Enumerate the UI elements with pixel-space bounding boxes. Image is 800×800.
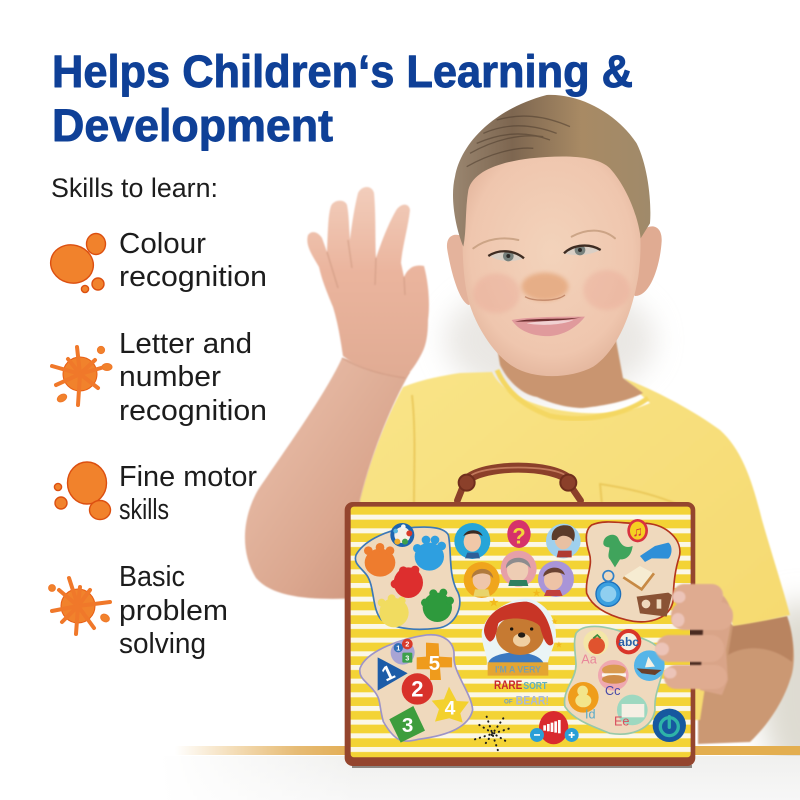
slogan: I'm a very rare sort of bear — [488, 662, 549, 708]
paw green — [421, 589, 454, 622]
panel: everyday objects — [586, 519, 680, 622]
text: colour recognition — [119, 228, 267, 293]
hair strands — [467, 116, 570, 167]
plus shape 5: 5 — [429, 652, 440, 675]
fingernails — [655, 591, 686, 678]
button 123: 3 — [405, 653, 409, 662]
radio — [637, 593, 672, 617]
clock — [596, 571, 621, 606]
letters Dd: Id — [585, 707, 596, 721]
dinosaur — [603, 535, 633, 567]
ship — [634, 650, 665, 681]
neck — [495, 335, 643, 408]
nose — [522, 273, 568, 301]
triangle 1: 1 — [378, 661, 398, 686]
slogan: I'm a very rare sort of bear: I'M A VERY — [495, 664, 541, 674]
tomato — [583, 630, 609, 655]
letters Ee: Ee — [614, 715, 629, 729]
paw orange — [364, 543, 395, 577]
volume control — [530, 711, 579, 744]
soft shadow around boy — [445, 280, 655, 400]
text: colour recognition: Colour — [119, 228, 206, 260]
text: letter and number recognition — [119, 328, 267, 427]
toy: activity case — [345, 467, 695, 766]
photo: boy holding toy — [245, 95, 794, 768]
sandwich — [623, 566, 654, 589]
duck — [568, 682, 599, 713]
title — [52, 46, 633, 151]
panel: alphabet objects — [564, 626, 665, 734]
text: letter and number recognition: recognition — [119, 395, 267, 427]
handle — [457, 467, 581, 501]
skills list — [46, 228, 267, 660]
toy shadow — [352, 765, 692, 768]
characters — [454, 520, 581, 598]
slogan: I'm a very rare sort of bear: OF — [504, 698, 513, 705]
collar — [497, 370, 648, 419]
ear right — [633, 226, 662, 296]
text: basic problem solving — [119, 561, 228, 660]
stars: ★ — [555, 640, 563, 650]
ear left — [447, 235, 475, 305]
letters Aa: Aa — [581, 652, 598, 666]
button 123: 2 — [405, 640, 409, 649]
text: letter and number recognition: number — [119, 361, 221, 393]
slogan: I'm a very rare sort of bear: RARE — [494, 679, 523, 692]
letters Cc: Cc — [605, 684, 620, 698]
subheading: Skills to learn: — [51, 173, 218, 203]
arm: raised — [245, 358, 410, 599]
text: basic problem solving: Basic — [119, 561, 185, 593]
text: colour recognition: recognition — [119, 261, 267, 293]
stars — [488, 588, 563, 650]
text: basic problem solving: problem — [119, 595, 228, 627]
paw yellow — [378, 594, 409, 627]
wall shadow — [760, 600, 800, 780]
title: Helps Children‘s Learning & — [52, 46, 633, 97]
text: fine motor skills: Fine motor — [119, 461, 257, 493]
arm: right of image — [698, 600, 794, 744]
whistle — [640, 543, 672, 562]
eyebrows — [473, 231, 615, 248]
table surface — [0, 746, 800, 800]
head — [447, 95, 662, 376]
music button: ♫ — [632, 523, 643, 539]
mouth — [512, 317, 585, 336]
cake — [598, 660, 629, 691]
button 123 — [391, 639, 415, 665]
stars: ★ — [532, 588, 542, 600]
icon: paint splat, letter and number recognition — [52, 346, 112, 405]
title: Development — [52, 100, 333, 151]
panel: colour paws — [355, 523, 460, 629]
hair — [453, 95, 650, 247]
case edge behind fingers — [690, 626, 710, 670]
hand: waving — [307, 187, 429, 378]
case frame — [345, 502, 695, 766]
panel: numbers and shapes — [360, 635, 473, 743]
palette button — [390, 523, 414, 547]
circle 2: 2 — [411, 677, 423, 702]
text: fine motor skills — [119, 461, 257, 526]
speaker dots — [475, 717, 510, 752]
text: letter and number recognition: Letter and — [119, 328, 252, 360]
button 123: 1 — [396, 643, 400, 652]
text: fine motor skills: skills — [119, 494, 169, 526]
character buttons: top row: ? — [512, 523, 526, 548]
eye left — [488, 251, 524, 261]
square 3: 3 — [402, 714, 413, 737]
text: basic problem solving: solving — [119, 628, 206, 660]
paw red — [391, 566, 423, 598]
stars: ★ — [488, 596, 500, 610]
shirt — [358, 372, 790, 720]
stripes panel — [351, 507, 691, 757]
slogan: I'm a very rare sort of bear: BEAR! — [516, 694, 549, 708]
paddington bear — [482, 598, 556, 665]
character buttons: bottom row — [464, 551, 574, 598]
star 4: 4 — [445, 698, 456, 719]
paw blue — [413, 536, 446, 571]
icon: paint splat, basic problem solving — [49, 578, 111, 634]
cheeks — [473, 270, 630, 313]
shirt seams and pocket — [412, 395, 690, 510]
hand finger creases — [327, 240, 405, 378]
slogan: I'm a very rare sort of bear: SORT — [523, 681, 548, 692]
hand: fingers over toy — [656, 584, 733, 695]
icon: paint blobs, fine motor skills — [54, 462, 110, 520]
icon: paint blobs, colour recognition — [46, 234, 106, 293]
face — [462, 151, 641, 376]
envelope — [617, 695, 648, 725]
abc button: abc — [618, 635, 639, 649]
stars: ★ — [551, 617, 558, 626]
power button — [653, 709, 686, 742]
eye right — [564, 245, 601, 255]
